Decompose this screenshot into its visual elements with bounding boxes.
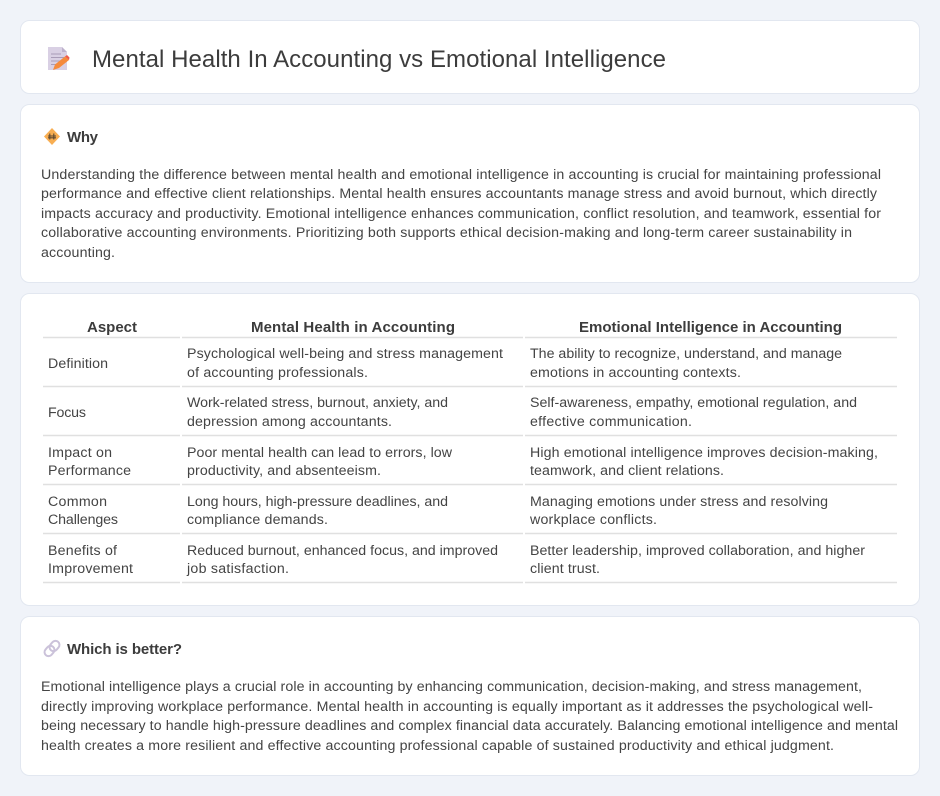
table row: common challenges: Common bbox=[48, 494, 107, 510]
text block: which is better paragraph: directly improving workplace performance. Mental health in accounting is equally important as it addresses the psychological well- bbox=[41, 699, 873, 715]
table header row: Emotional Intelligence in Accounting bbox=[579, 319, 842, 336]
table row: definition: of accounting professionals. bbox=[187, 365, 368, 381]
text block: why paragraph bbox=[41, 167, 881, 261]
table row: impact on performance: teamwork, and client relations. bbox=[530, 463, 724, 479]
table row: common challenges: workplace conflicts. bbox=[529, 512, 657, 528]
icon: link bbox=[43, 639, 61, 658]
panel: which is better bbox=[20, 616, 920, 776]
heading: why: Why bbox=[67, 129, 99, 146]
panel: why bbox=[20, 104, 920, 282]
text block: why paragraph: impacts accuracy and productivity. Emotional intelligence enhances communication, conflict resolution, and teamwork, essential for bbox=[41, 206, 881, 222]
table row: focus: effective communication. bbox=[530, 414, 692, 430]
table row: benefits of improvement: job satisfaction. bbox=[186, 561, 289, 577]
heading: which is better: Which is better? bbox=[67, 641, 182, 658]
table row: focus: depression among accountants. bbox=[187, 414, 392, 430]
text block: why paragraph: Understanding the difference between mental health and emotional intelligence in accounting is crucial for maintaining professional bbox=[41, 167, 881, 183]
table row: impact on performance: High emotional intelligence improves decision-making, bbox=[530, 445, 878, 461]
table row: impact on performance: productivity, and absenteeism. bbox=[187, 463, 381, 479]
text block: which is better paragraph bbox=[41, 679, 898, 754]
table row: focus: Work-related stress, burnout, anxiety, and bbox=[187, 395, 448, 411]
table row: impact on performance: Poor mental health can lead to errors, low bbox=[187, 445, 453, 461]
table row: focus bbox=[48, 395, 857, 430]
table row: benefits of improvement: Benefits of bbox=[48, 543, 117, 559]
table header row: Aspect bbox=[87, 319, 137, 336]
table row: common challenges: Long hours, high-pressure deadlines, and bbox=[187, 494, 448, 510]
text block: which is better paragraph: Emotional intelligence plays a crucial role in accounting by enhancing communication, decision-making, and stress management, bbox=[41, 679, 862, 695]
panel: header bbox=[20, 20, 920, 94]
table row: common challenges: Challenges bbox=[48, 512, 118, 528]
table row: common challenges: Managing emotions under stress and resolving bbox=[530, 494, 828, 510]
table row: benefits of improvement: Better leadership, improved collaboration, and higher bbox=[530, 543, 865, 559]
table header row: Mental Health in Accounting bbox=[251, 319, 455, 336]
panel: comparison table bbox=[20, 294, 920, 606]
table row: definition: Definition bbox=[48, 356, 108, 372]
title: Mental Health In Accounting vs Emotional Intelligence bbox=[92, 46, 666, 73]
table row: definition: emotions in accounting contexts. bbox=[530, 365, 741, 381]
table row: benefits of improvement bbox=[48, 543, 865, 577]
table row: common challenges bbox=[48, 494, 828, 528]
table row: common challenges: compliance demands. bbox=[187, 512, 328, 528]
table row: impact on performance: Performance bbox=[48, 463, 131, 479]
text block: why paragraph: accounting. bbox=[41, 245, 115, 261]
table row: impact on performance: Impact on bbox=[48, 445, 112, 461]
table row: definition: Psychological well-being and stress management bbox=[187, 346, 503, 362]
table row: benefits of improvement: client trust. bbox=[530, 561, 600, 577]
table row: focus: Self-awareness, empathy, emotional regulation, and bbox=[530, 395, 857, 411]
icon: memo with pencil bbox=[48, 47, 70, 70]
text block: which is better paragraph: being necessary to handle high-pressure deadlines and complex financial data accurately. Balancing emotional intelligence and mental bbox=[41, 718, 898, 734]
table row: definition: The ability to recognize, understand, and manage bbox=[530, 346, 842, 362]
text block: why paragraph: collaborative accounting environments. Prioritizing both supports ethical decision-making and long-term career sustainability in bbox=[41, 225, 852, 241]
table header row bbox=[87, 319, 842, 336]
table row: definition bbox=[48, 346, 842, 381]
table row: benefits of improvement: Reduced burnout, enhanced focus, and improved bbox=[187, 543, 498, 559]
table row: impact on performance bbox=[48, 445, 878, 479]
text block: which is better paragraph: health creates a more resilient and effective accounting professional capable of sustained productivity and ethical judgment. bbox=[41, 738, 834, 754]
table row: benefits of improvement: Improvement bbox=[48, 561, 133, 577]
text block: why paragraph: performance and effective client relationships. Mental health ensures accountants manage stress and avoid burnout, which directly bbox=[41, 186, 878, 202]
table row: focus: Focus bbox=[48, 405, 86, 421]
icon: diamond sign bbox=[44, 128, 60, 145]
